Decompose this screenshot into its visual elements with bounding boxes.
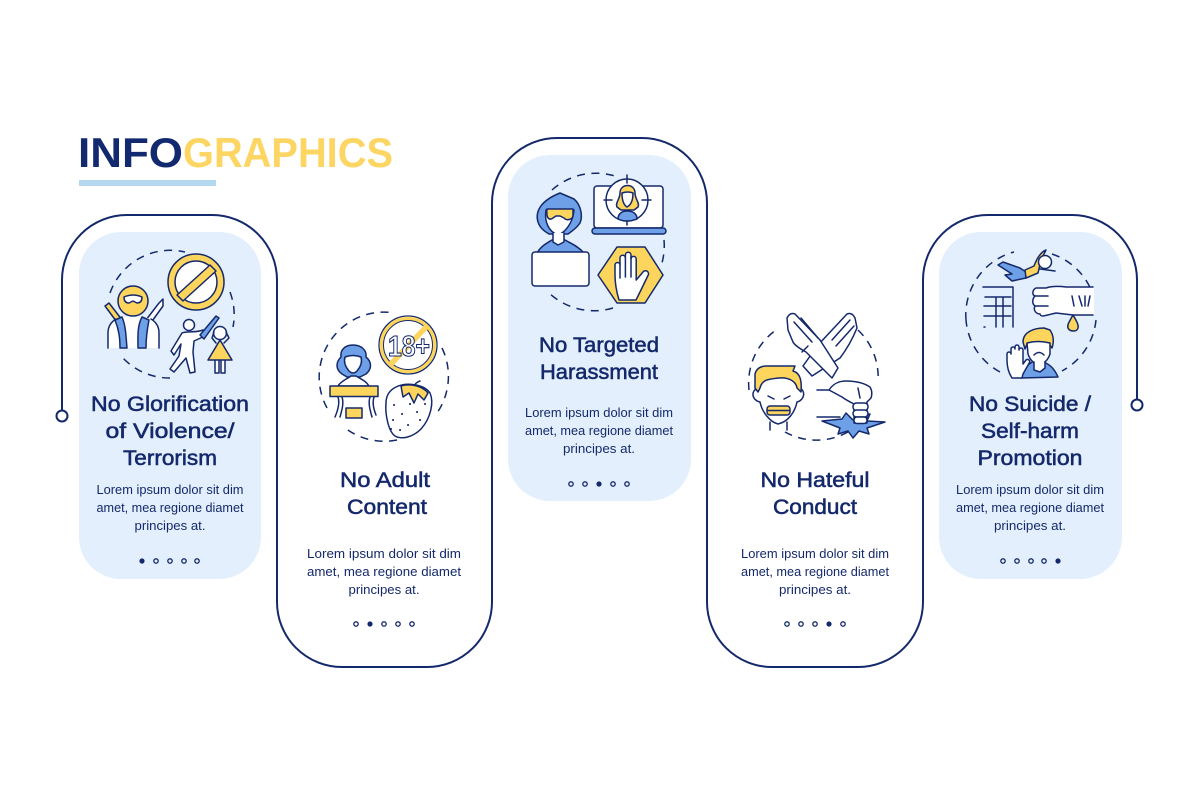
fist punching: [817, 381, 885, 438]
title underline: [79, 180, 216, 186]
pagination dots: [139, 558, 199, 564]
body text: [741, 547, 890, 597]
heading: [340, 468, 430, 519]
body text: principes at.: [563, 442, 635, 456]
body text: Lorem ipsum dolor sit dim: [307, 547, 461, 561]
icon: self-harm: [966, 250, 1096, 378]
start dot: [56, 410, 68, 422]
panel: card 3: [525, 173, 674, 487]
body text: Lorem ipsum dolor sit dim: [96, 483, 244, 497]
body text: [307, 547, 462, 597]
body text: [96, 483, 244, 533]
icon: adult content: [319, 312, 448, 441]
heading: Harassment: [540, 360, 658, 384]
body text: Lorem ipsum dolor sit dim: [741, 547, 889, 561]
panel: card 4: [741, 314, 890, 627]
heading: Self-harm: [981, 419, 1079, 443]
heading: Terrorism: [123, 446, 217, 470]
panel fill: card 1: [79, 232, 261, 579]
icon: hateful conduct: [749, 314, 885, 440]
title: [78, 129, 393, 176]
panel: card 5: [956, 250, 1105, 564]
pagination dots: [354, 621, 414, 627]
heading: [969, 392, 1091, 470]
panel fill: card 3: [508, 155, 691, 501]
end dot: [1132, 400, 1142, 410]
icon: violence: [105, 250, 234, 378]
heading: [91, 392, 249, 470]
angry face: [753, 366, 804, 430]
body text: amet, mea regione diamet: [96, 501, 244, 515]
pagination dots: [569, 481, 629, 487]
body text: principes at.: [994, 519, 1066, 533]
heading: No Suicide /: [969, 392, 1091, 416]
panel fill: card 5: [939, 232, 1122, 579]
panel: card 2: [307, 312, 462, 627]
heading: of Violence/: [106, 419, 235, 443]
icon: harassment: [532, 173, 666, 311]
falling figure: [998, 250, 1055, 281]
attacker with club: [170, 316, 219, 373]
body text: [956, 483, 1105, 533]
heading: Conduct: [773, 495, 857, 519]
woman at desk: [330, 345, 378, 418]
18+ prohibited: 18+: [388, 331, 430, 363]
hooded hacker: [532, 193, 589, 286]
panel: card 1: [91, 250, 249, 564]
heading: [760, 468, 870, 519]
heading: No Hateful: [760, 468, 870, 492]
victim: [208, 326, 232, 373]
body text: principes at.: [134, 519, 206, 533]
heading: Promotion: [978, 446, 1082, 470]
body text: amet, mea regione diamet: [956, 501, 1105, 515]
body text: Lorem ipsum dolor sit dim: [525, 406, 673, 420]
crossed arms: [787, 314, 857, 378]
laptop with target: [592, 175, 666, 234]
title: GRAPHICS: [183, 129, 393, 176]
fist with cuts: [1033, 286, 1094, 331]
body text: amet, mea regione diamet: [307, 565, 462, 579]
strawberry: [386, 381, 432, 438]
heading: No Adult: [340, 468, 430, 492]
heading: No Glorification: [91, 392, 249, 416]
body text: amet, mea regione diamet: [741, 565, 890, 579]
body text: [525, 406, 674, 456]
heading: [539, 333, 659, 384]
person with stop hand: [1007, 328, 1058, 378]
heading: Content: [347, 495, 427, 519]
body text: principes at.: [779, 583, 851, 597]
stop hand sign: [598, 247, 663, 303]
pagination dots: [1001, 558, 1061, 564]
heading: No Targeted: [539, 333, 659, 357]
title: INFO: [78, 129, 183, 176]
body text: amet, mea regione diamet: [525, 424, 674, 438]
pagination dots: [785, 621, 845, 627]
connecting outline of all cards: [62, 138, 1137, 667]
body text: principes at.: [348, 583, 420, 597]
ninja: [105, 286, 163, 348]
body text: Lorem ipsum dolor sit dim: [956, 483, 1104, 497]
prohibition sign: [168, 254, 224, 310]
building: [983, 287, 1013, 327]
